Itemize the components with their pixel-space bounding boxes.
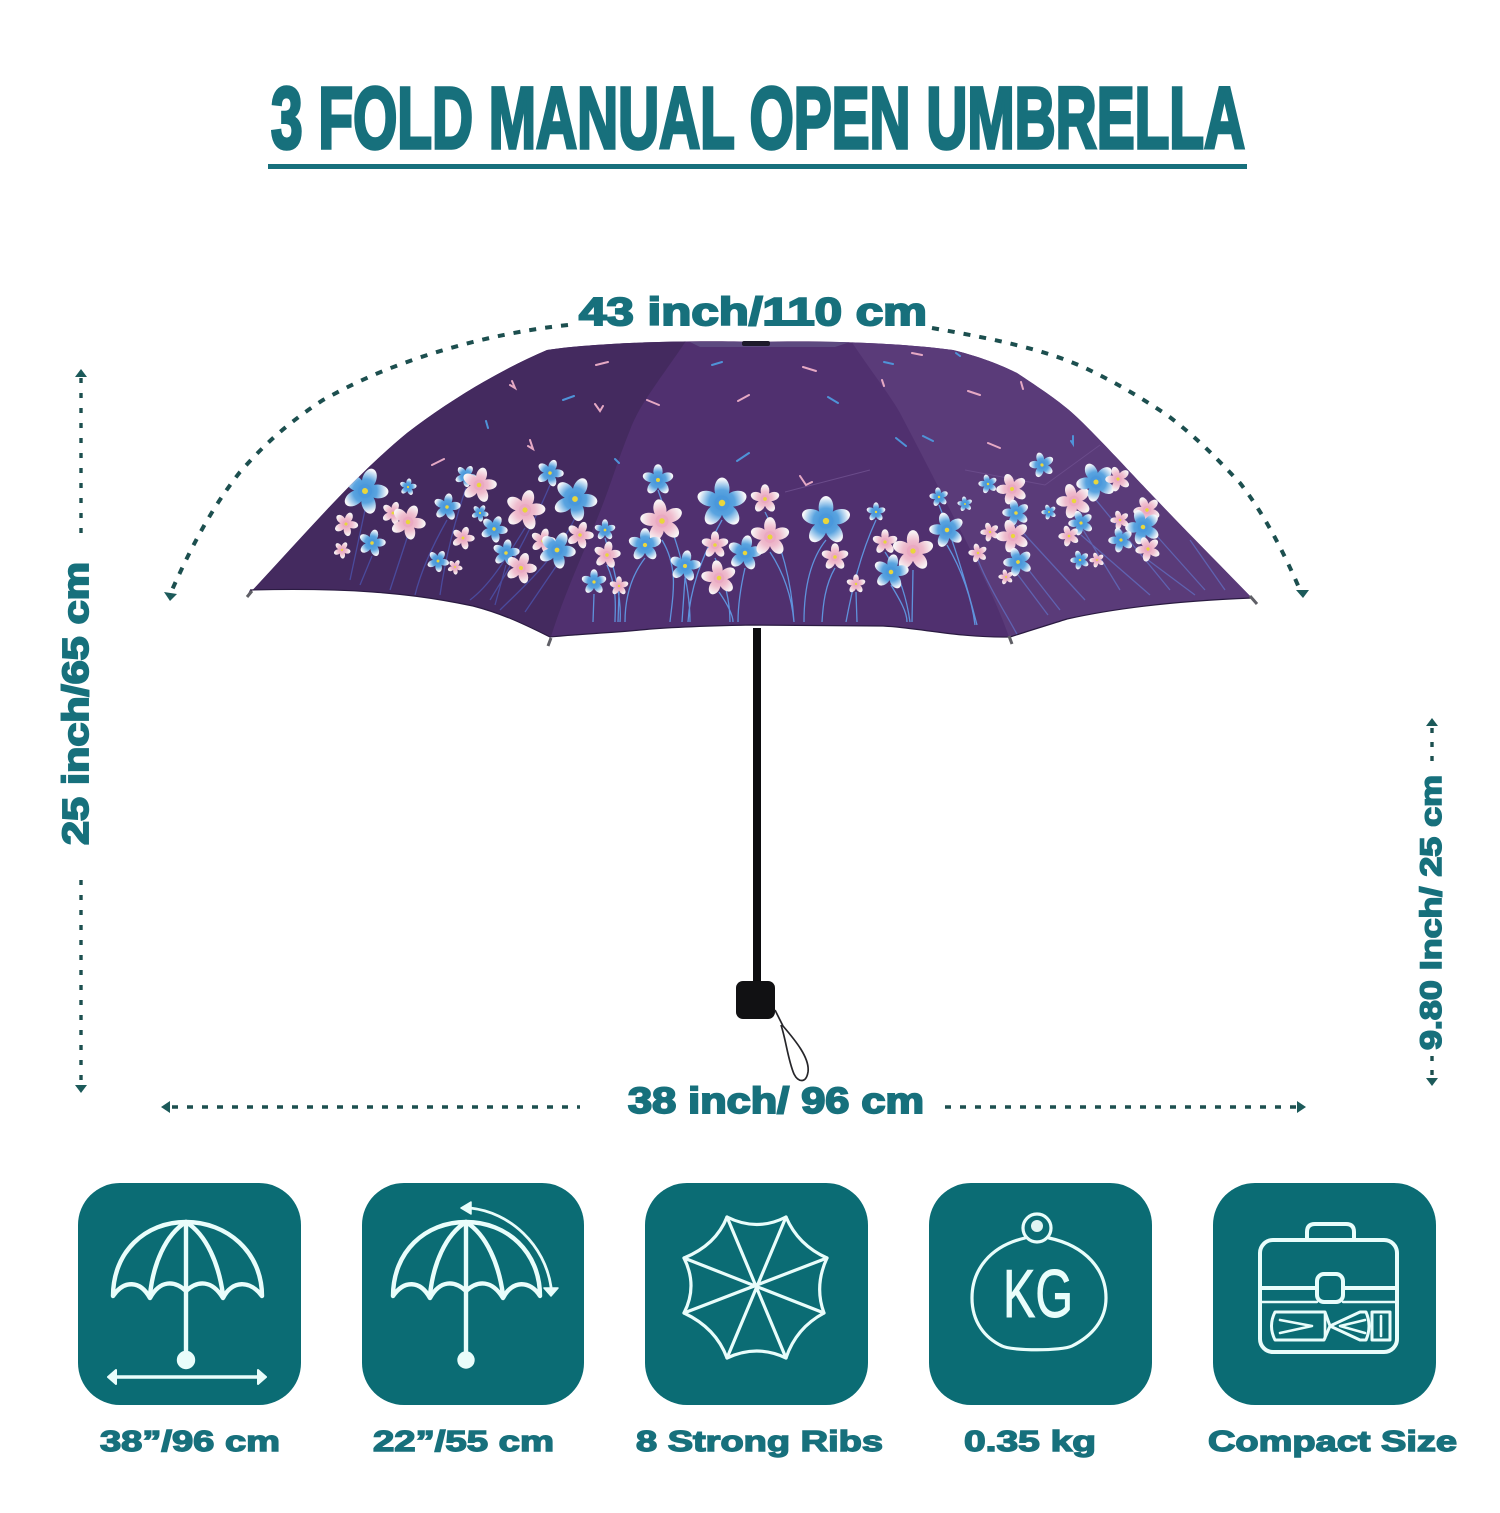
label: 22”/55 cm	[373, 1426, 554, 1458]
icon tile	[929, 1183, 1152, 1405]
span label: 38 inch/ 96 cm	[628, 1080, 924, 1121]
stems	[350, 485, 1225, 640]
label: Compact Size	[1208, 1426, 1457, 1458]
label: 8 Strong Ribs	[636, 1426, 883, 1458]
feature: weight	[929, 1183, 1152, 1458]
rib tips	[247, 591, 1257, 646]
span arrow	[161, 1101, 1306, 1113]
canopy	[248, 341, 1250, 636]
umbrella product photo	[200, 335, 1280, 1080]
flowers	[329, 449, 1166, 598]
title underline	[268, 164, 1247, 169]
total height label: 25 inch/65 cm	[55, 562, 96, 845]
feature: ribs	[636, 1183, 883, 1458]
icon: briefcase with folded umbrella	[1260, 1224, 1397, 1352]
wrist strap	[775, 1010, 808, 1080]
lower hem line	[250, 589, 1252, 637]
icon: open umbrella with width arrow	[108, 1222, 266, 1384]
folded length label: 9.80 Inch/ 25 cm	[1415, 775, 1448, 1050]
icon: weight	[972, 1214, 1106, 1350]
top cap	[742, 341, 770, 346]
icon tile	[645, 1183, 868, 1405]
icon tile	[362, 1183, 584, 1405]
arc dimension arrow left	[164, 325, 568, 601]
folded length arrow	[1426, 718, 1438, 1086]
icon tile	[1213, 1183, 1436, 1405]
width arc label: 43 inch/110 cm	[579, 291, 927, 334]
icon: umbrella with rotation arrow	[393, 1202, 558, 1366]
feature: folded diameter	[362, 1183, 584, 1458]
feature: compact size	[1208, 1183, 1457, 1458]
arc dimension arrow right	[932, 328, 1309, 598]
label: 38”/96 cm	[100, 1426, 280, 1458]
shaft	[753, 628, 761, 984]
handle	[736, 981, 775, 1019]
icon: eight rib canopy from above	[684, 1217, 827, 1358]
total height arrow	[75, 369, 87, 1093]
small birds	[432, 353, 1073, 485]
label: 0.35 kg	[964, 1426, 1096, 1458]
KG mark: KG	[1003, 1256, 1073, 1332]
feature: open diameter	[78, 1183, 301, 1458]
icon tile	[78, 1183, 301, 1405]
